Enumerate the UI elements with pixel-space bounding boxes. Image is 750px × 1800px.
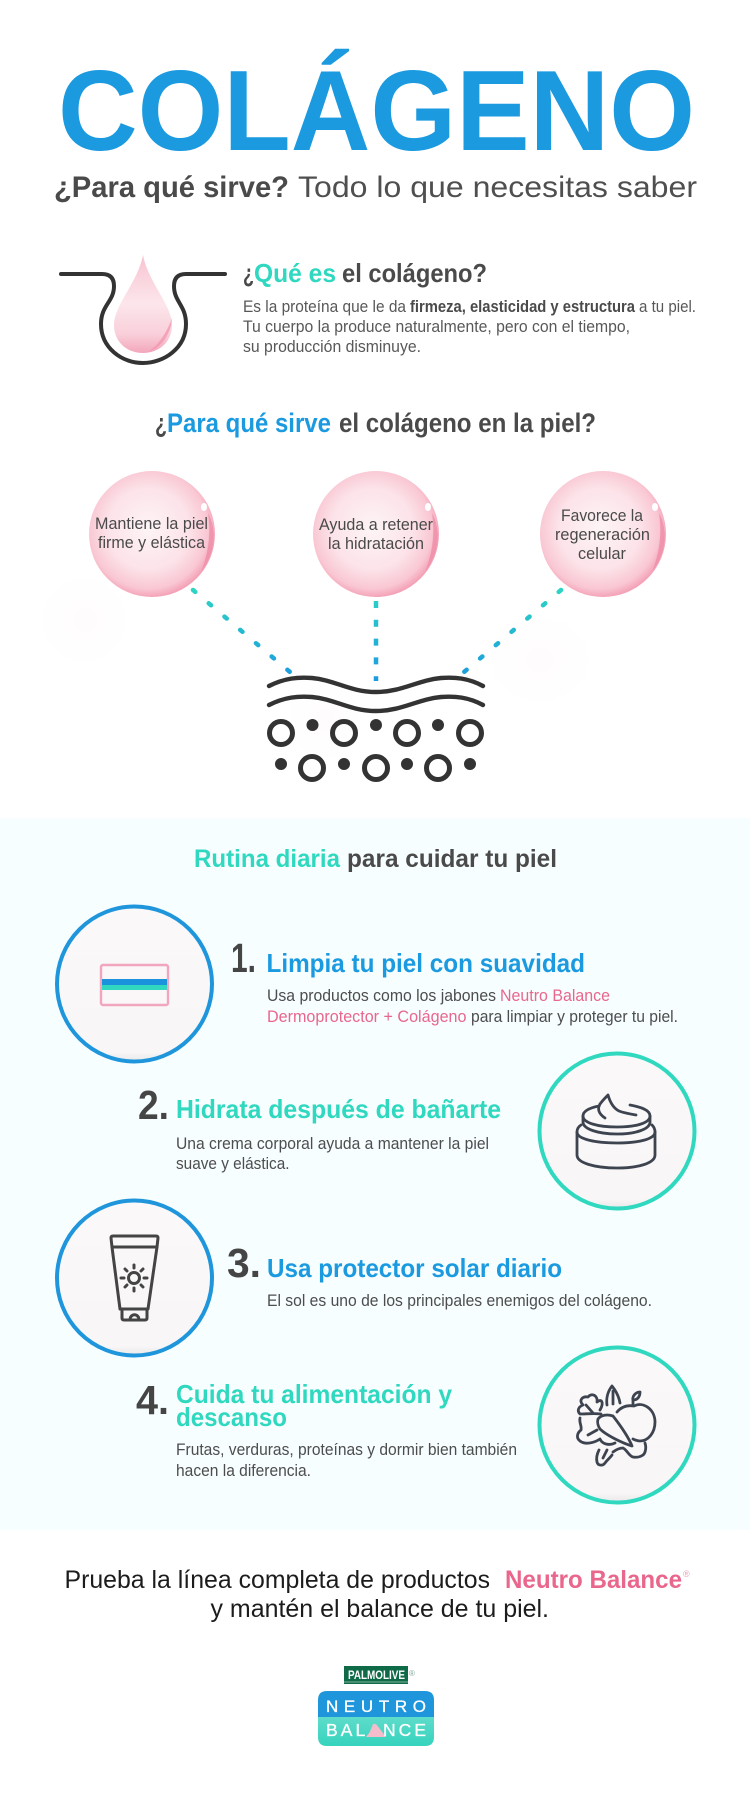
step 1 — [231, 935, 678, 1026]
step 1: Usa productos como los jabones — [267, 987, 496, 1005]
text: definition: firmeza, elasticidad y estructura — [410, 298, 636, 316]
step 3: El sol es uno de los principales enemigos del colágeno. — [267, 1292, 652, 1310]
circle icon: cream jar — [540, 1054, 694, 1208]
text: definition: a tu piel. — [639, 298, 696, 316]
circle icon: food — [540, 1348, 694, 1502]
heading: que es: Qué es — [254, 258, 336, 288]
heading: rutina: Rutina diaria — [194, 845, 341, 873]
section: que es el colageno — [243, 258, 696, 356]
logo: neutro balance — [318, 1691, 434, 1746]
icon: collagen drop in skin — [61, 255, 225, 363]
faint bubble reflections — [25, 560, 610, 775]
closing message: Neutro Balance — [505, 1566, 682, 1594]
icon: skin layers — [269, 678, 483, 780]
step 1: 1. — [231, 935, 256, 981]
subtitle: Todo lo que necesitas saber — [298, 171, 697, 204]
step 2 — [138, 1082, 501, 1173]
bubble: firme y elastica — [89, 471, 215, 597]
heading: para que sirve: ¿ — [155, 408, 167, 438]
logo: neutro balance: NEUTRO — [326, 1697, 426, 1716]
closing message: ® — [683, 1569, 690, 1579]
closing message: Prueba la línea completa de productos — [64, 1566, 490, 1594]
arrow: dotted connectors — [193, 590, 561, 681]
heading: que es — [243, 258, 487, 288]
bubble: regeneracion: regeneración — [555, 525, 650, 544]
bubble: hidratacion: Ayuda a retener — [319, 515, 433, 534]
logo: palmolive: PALMOLIVE — [348, 1670, 405, 1682]
step 2: Hidrata después de bañarte — [176, 1094, 501, 1124]
bubble: firme y elastica: firme y elástica — [98, 533, 206, 552]
text: definition — [243, 298, 696, 356]
step 1: Dermoprotector + Colágeno — [267, 1008, 466, 1026]
step 4: descanso — [176, 1402, 287, 1432]
step 4: hacen la diferencia. — [176, 1462, 311, 1480]
step 4: Cuida tu alimentación y — [176, 1379, 453, 1409]
circle icon: sunscreen tube — [57, 1200, 212, 1356]
heading: para que sirve — [155, 408, 596, 438]
logo: palmolive — [344, 1666, 415, 1684]
text: definition: su producción disminuye. — [243, 338, 421, 356]
closing message — [64, 1566, 690, 1623]
subtitle: ¿Para qué sirve? — [54, 171, 289, 204]
step 3: 3. — [227, 1240, 261, 1286]
bubble: hidratacion — [313, 471, 439, 597]
step 3: Usa protector solar diario — [267, 1253, 562, 1283]
bubble: hidratacion: la hidratación — [328, 534, 424, 553]
title: COLÁGENO — [58, 48, 695, 175]
subtitle — [54, 171, 697, 204]
step 4: 4. — [136, 1377, 169, 1423]
step 1: Neutro Balance — [500, 987, 610, 1005]
step 2: suave y elástica. — [176, 1155, 290, 1173]
bubble: regeneracion: Favorece la — [561, 506, 643, 525]
heading: que es: el colágeno? — [342, 258, 487, 288]
heading: para que sirve: el colágeno en la piel? — [339, 408, 596, 438]
closing message: y mantén el balance de tu piel. — [210, 1595, 549, 1623]
heading: que es: ¿ — [243, 258, 254, 288]
bubble: regeneracion: celular — [578, 544, 626, 563]
text: definition: Tu cuerpo la produce naturalmente, pero con el tiempo, — [243, 318, 630, 336]
panel: rutina diaria — [0, 818, 750, 1530]
bubble: regeneracion — [540, 471, 666, 597]
step 2: 2. — [138, 1082, 169, 1128]
step 4 — [136, 1377, 517, 1480]
heading: rutina: para cuidar tu piel — [347, 845, 557, 873]
text: definition: Es la proteína que le da — [243, 298, 407, 316]
logo: palmolive: ® — [409, 1669, 415, 1678]
step 2: Una crema corporal ayuda a mantener la piel — [176, 1135, 489, 1153]
step 4: Frutas, verduras, proteínas y dormir bien también — [176, 1441, 517, 1459]
bubble: firme y elastica: Mantiene la piel — [95, 514, 208, 533]
step 1: Limpia tu piel con suavidad — [266, 948, 585, 978]
heading: rutina — [194, 845, 557, 873]
step 3 — [227, 1240, 652, 1310]
logo: neutro balance: BALANCE — [326, 1720, 426, 1740]
heading: para que sirve: Para qué sirve — [167, 408, 331, 438]
circle icon: soap — [57, 906, 212, 1062]
step 1: para limpiar y proteger tu piel. — [471, 1008, 678, 1026]
